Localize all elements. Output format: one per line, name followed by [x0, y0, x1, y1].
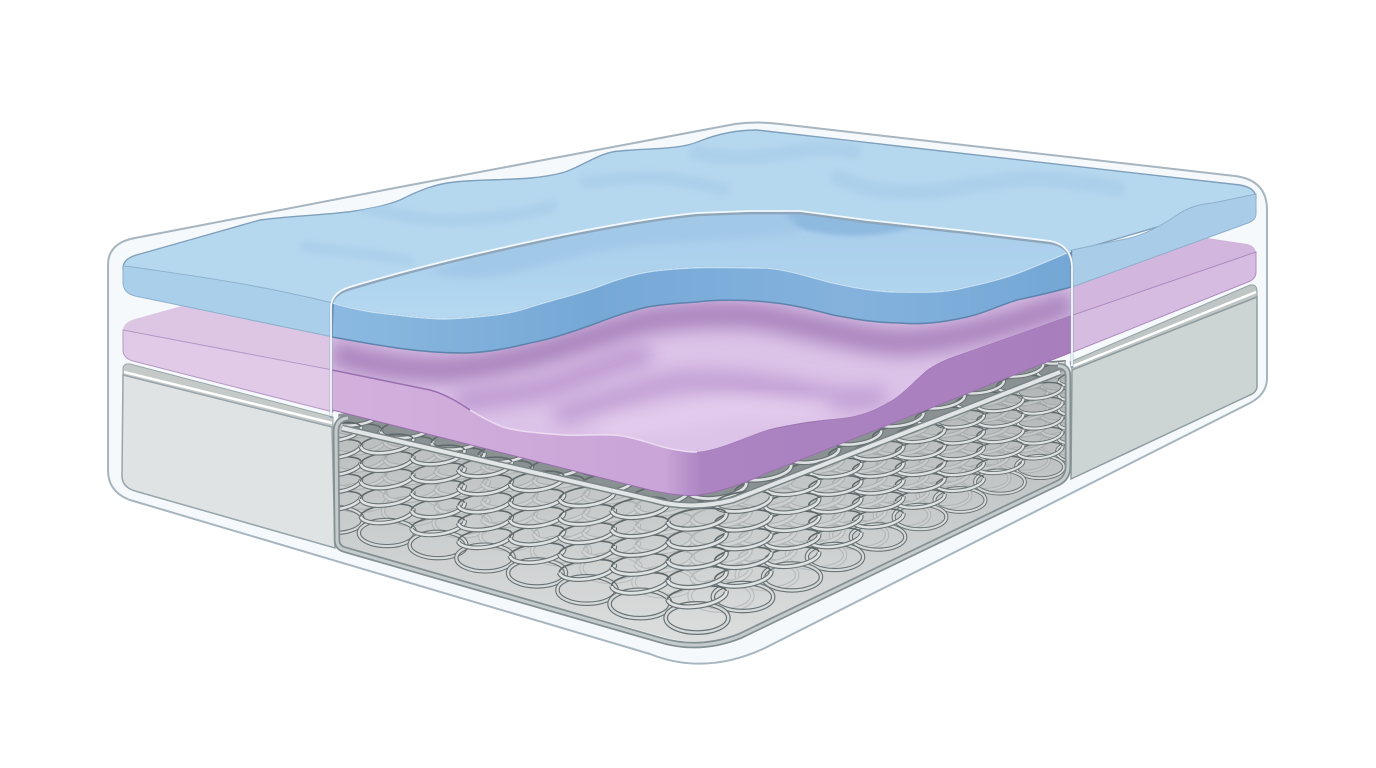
blue layer: soft waves on surface	[300, 148, 1124, 262]
blue layer: centre top surface	[333, 213, 1071, 319]
blue layer: left front face	[123, 266, 333, 337]
purple foam surface shading	[332, 302, 1072, 430]
purple foam edge highlight	[470, 410, 697, 452]
illustration: mattress cutaway	[107, 122, 1268, 665]
blue layer: centre wave shading	[442, 214, 910, 276]
transparent outer cover	[108, 122, 1267, 664]
base box: left side	[122, 364, 335, 548]
blue comfort layer	[123, 130, 1256, 353]
purple foam layer	[123, 238, 1256, 495]
spring bay background	[338, 360, 1066, 642]
spring unit	[332, 360, 1072, 648]
clear cover cut edges	[331, 211, 1072, 418]
coil springs	[338, 360, 1066, 635]
purple foam: left side	[123, 287, 340, 412]
blue layer: right front face	[1072, 194, 1256, 287]
top border wire	[342, 372, 1060, 506]
blue layer: back top surface	[123, 130, 1256, 303]
purple foam: right side	[1040, 238, 1256, 352]
purple foam: centre top surface	[332, 280, 1072, 452]
bay frame	[336, 366, 1068, 645]
base box: right side	[1070, 285, 1257, 479]
purple foam edge line	[332, 370, 470, 410]
blue layer: front edge highlight	[333, 251, 1071, 319]
purple foam: centre front face	[332, 315, 1072, 495]
blue layer: centre front face	[332, 251, 1071, 353]
